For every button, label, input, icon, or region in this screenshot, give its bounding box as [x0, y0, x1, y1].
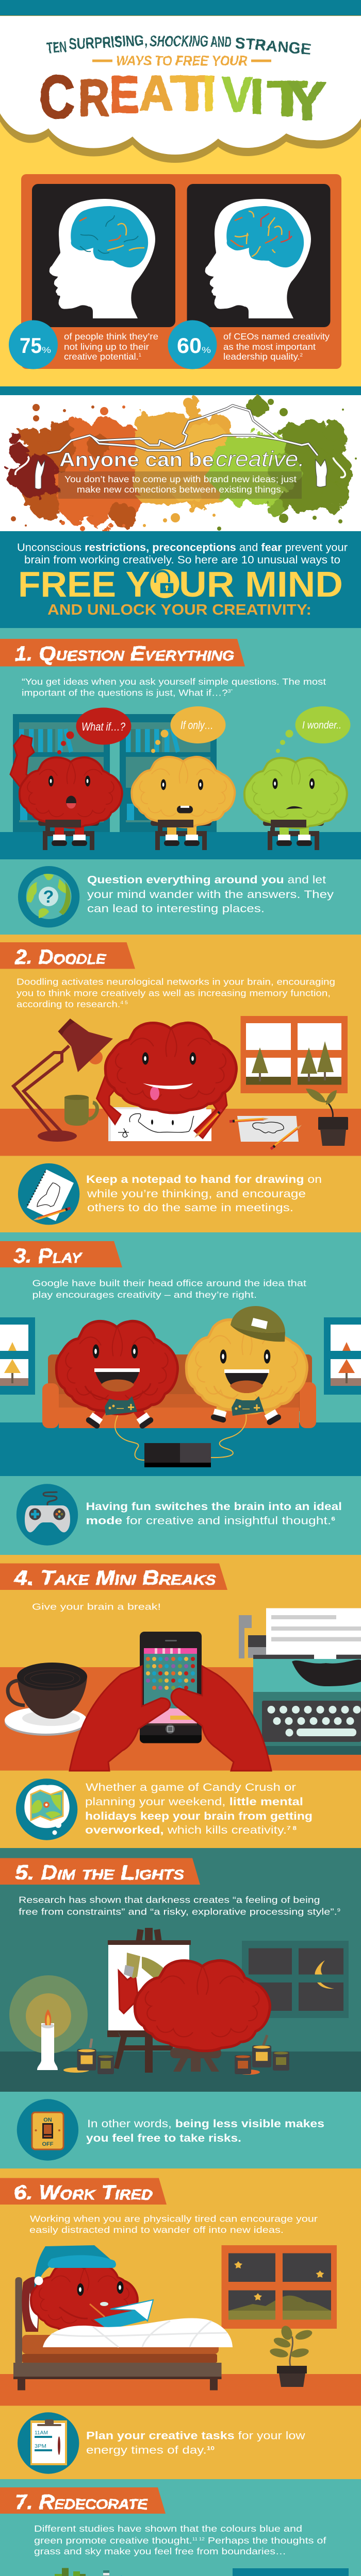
title: first line: AND: [210, 33, 232, 50]
heading: 1 Question Everything: 1. Question Everything: [14, 642, 234, 665]
text: section 4 tip: overworked, which kills creativity.: [85, 1824, 264, 1836]
console and cables: [115, 1413, 247, 1467]
night window: [222, 2245, 337, 2329]
stat: 75 percent: of people think they’re: [64, 331, 158, 342]
text: section 1 tip: Question everything around you and let: [87, 874, 326, 886]
text: section 6 tip: 10: [207, 2445, 215, 2451]
text: section 1 quote: 3”: [228, 688, 233, 693]
character: red brain arms: [70, 1666, 271, 1771]
text: section 2 intro: according to research.: [17, 999, 106, 1009]
heading: 4 Take Mini Breaks: [0, 1563, 227, 1590]
text: section 5 intro: free from constraints” and “a risky, explorative processing style”.: [19, 1906, 274, 1917]
icon: clipboard: 3PM: [35, 2444, 46, 2449]
panel: left head: [32, 184, 175, 327]
text: section 1 quote: important of the questions is just, What if…?: [22, 687, 198, 698]
text: section 6 tip: [86, 2430, 305, 2456]
city window: [233, 2568, 349, 2576]
text: section 4 intro: Give your brain a break!: [32, 1601, 161, 1612]
typewriter: [239, 1608, 361, 1755]
blanket: [43, 2318, 233, 2347]
panel: free your mind intro: AND UNLOCK YOUR CREATIVITY:: [47, 602, 311, 618]
section 5 background: [0, 1848, 361, 2052]
text: section 2 intro: 4 5: [120, 1000, 128, 1005]
text: section 5 intro: Research has shown that darkness creates “a feeling of being: [19, 1895, 320, 1905]
panel: free your mind intro: brain from working creatively. So here are 10 unusual ways to: [24, 554, 340, 566]
character: orange gamer: [186, 1306, 307, 1426]
stat: 60 percent: of CEOs named creativity: [223, 331, 330, 342]
panel: yellow header background: [0, 103, 361, 386]
section 5 tip background: [0, 2092, 361, 2168]
title: first line: SURPRISING,: [69, 32, 147, 53]
icon: padlock O: [151, 569, 179, 598]
section 4 background: [0, 1555, 361, 1848]
candle with glow: [9, 1975, 88, 2070]
text: section 4 tip: Whether a game of Candy Crush or: [86, 1782, 296, 1793]
heading: 6 Work Tired: [0, 2178, 167, 2205]
paint cans: [63, 2035, 289, 2075]
callout box: You don’t have to come up with brand new ideas; just: [64, 474, 297, 484]
callout box: [58, 471, 302, 499]
heading: 3 Play: [0, 1241, 122, 1267]
text: section 1 tip: [87, 874, 334, 915]
icon: clipboard: 11AM: [35, 2430, 48, 2436]
heading: 2 Doodle: [0, 942, 135, 969]
text: section 3 tip: Having fun switches the brain into an ideal: [86, 1501, 342, 1513]
section 3 background: [0, 1232, 361, 1555]
stat: 60 percent: leadership quality.: [223, 351, 296, 362]
character: red gamer: [56, 1321, 178, 1430]
stat: 60 percent: %: [202, 345, 211, 355]
window: [240, 1016, 348, 1093]
text: section 6 intro: [29, 2213, 318, 2235]
title: first line: SHOCKING: [150, 33, 208, 50]
heading: Anyone can be creative: creative.: [216, 447, 305, 471]
heading: Anyone can be creative: [59, 447, 305, 471]
stat: 60 percent: 2: [300, 352, 303, 358]
heading: 3 Play: 3. Play: [14, 1245, 83, 1267]
heading: 1 Question Everything: [0, 639, 245, 667]
text: section 2 tip: [86, 1174, 322, 1214]
illustration: mini break desk: [0, 1608, 361, 1771]
panel: statistics: [9, 174, 341, 369]
icon: map thought bubble: [16, 1778, 77, 1840]
icon: light switch: [17, 2099, 78, 2161]
text: section 4 tip: planning your weekend, little mental: [85, 1796, 303, 1808]
sofa: [42, 1354, 316, 1428]
text: section 7 intro: Different studies have shown that the colours blue and: [34, 2523, 302, 2534]
character: tired brain: [31, 2245, 153, 2334]
plant: [269, 2324, 314, 2387]
text: section 3 intro: [32, 1278, 306, 1300]
character: red brain raising arm: [10, 735, 122, 850]
text: section 7 intro: 11 12: [192, 2537, 205, 2541]
panel: free your mind intro: Unconscious restrictions, preconceptions and fear prevent your: [17, 542, 348, 553]
title: CREATIVITY: Y: [288, 72, 326, 131]
stat: 75 percent: 1: [139, 352, 141, 358]
icon: clipboard: [18, 2412, 79, 2474]
text: section 3 tip: 6: [331, 1516, 335, 1522]
callout box: make new connections between existing things.: [77, 484, 284, 495]
icon: light switch: ON: [43, 2117, 52, 2123]
heading: 7 Redecorate: 7. Redecorate: [15, 2491, 148, 2514]
icon: notepad: [18, 1163, 79, 1225]
title: CREATIVITY: T: [170, 66, 214, 121]
section 6 background: [0, 2168, 361, 2479]
mug: [64, 1095, 97, 1126]
text: section 7 intro: green promote creative thought.: [34, 2535, 162, 2546]
illustration: playing video games: [0, 1306, 361, 1476]
text: section 6 intro: Working when you are physically tired can encourage your: [30, 2213, 318, 2224]
text: section 7 intro: [34, 2523, 326, 2556]
text: section 1 tip: can lead to interesting places.: [87, 903, 265, 915]
text: section 3 intro: Google have built their head office around the idea that: [32, 1278, 306, 1288]
title: CREATIVITY: E: [109, 66, 139, 124]
heading: 5 Dim the Lights: 5. Dim the Lights: [15, 1861, 184, 1884]
text: section 1 tip: your mind wander with the answers. They: [87, 889, 334, 901]
stat: 75 percent: creative potential.: [64, 351, 135, 362]
text: section 2 intro: you to think more creatively as well as increasing memory function,: [17, 988, 331, 998]
title: first line: TEN: [46, 38, 68, 57]
speech bubbles: I wonder..: [302, 720, 341, 731]
title: CREATIVITY: V: [222, 67, 252, 122]
top teal band: [0, 0, 361, 16]
text: section 4 tip: [85, 1782, 313, 1836]
text: section 1 quote: “You get ideas when you ask yourself simple questions. The most: [22, 676, 326, 687]
easel and canvas: [107, 1928, 191, 2073]
text: section 2 intro: [17, 977, 335, 1009]
cloud header: [0, 15, 361, 163]
stat: 75 percent: 75: [20, 333, 42, 358]
panel: paint splatter: [7, 398, 357, 531]
night window: [242, 1941, 349, 2018]
panel: free your mind intro: [0, 531, 361, 628]
character: orange brain: [132, 757, 235, 850]
section 2 background: [0, 935, 361, 1232]
text: section 6 tip: energy times of day.: [86, 2444, 183, 2456]
windows: [0, 1317, 361, 1395]
title: first line: STRANGE: [234, 35, 312, 58]
papers and pencils: [108, 1107, 303, 1150]
nightcap: [34, 2245, 116, 2287]
text: section 2 tip: others to do the same in meetings.: [87, 1202, 293, 1214]
text: section 3 tip: [86, 1501, 342, 1527]
icon: globe question: [18, 866, 79, 927]
plant: [306, 1089, 348, 1146]
text: section 6 tip: Plan your creative tasks for your low: [86, 2430, 305, 2442]
illustration: tired in bed: [0, 2245, 361, 2406]
title: CREATIVITY: R: [78, 69, 109, 127]
title: CREATIVITY: A: [139, 66, 173, 121]
wires and clips: [15, 405, 345, 478]
title: CREATIVITY: T: [267, 71, 307, 126]
icon: light switch: OFF: [42, 2141, 54, 2147]
shelf of books: [51, 2568, 132, 2576]
speech bubbles: [57, 706, 351, 754]
character: doodling brain: [97, 1023, 236, 1139]
section 1 background: [0, 628, 361, 935]
floor section 5: [0, 2052, 361, 2092]
text: section 2 intro: Doodling activates neurological networks in your brain, encouraging: [17, 977, 335, 987]
character: green brain: [244, 758, 347, 850]
panel: free your mind intro: UR MIND: [179, 564, 343, 604]
text: section 1 quote: [22, 676, 326, 698]
stat: 75 percent: [9, 320, 158, 369]
stat: 60 percent: [168, 320, 330, 369]
illustration: classroom: [0, 706, 361, 859]
title: CREATIVITY: C: [39, 63, 75, 131]
teal divider: [0, 386, 361, 395]
stool and brain: [119, 1953, 270, 2072]
panel: right head: [187, 184, 330, 327]
text: section 3 tip: mode for creative and insightful thought.: [86, 1515, 288, 1527]
title: first line: [46, 32, 312, 58]
heading: 2 Doodle: 2. Doodle: [14, 946, 106, 969]
text: section 6 intro: easily distracted mind to wander off into new ideas.: [29, 2225, 284, 2235]
panel: free your mind intro: FREE Y: [18, 564, 150, 604]
heading: 5 Dim the Lights: [0, 1858, 200, 1885]
text: section 2 tip: Keep a notepad to hand for drawing on: [86, 1174, 322, 1185]
cap: [231, 1306, 285, 1342]
heading: Anyone can be creative: Anyone can be: [59, 449, 214, 471]
text: section 4 tip: 7 8: [287, 1825, 297, 1832]
notebook: [90, 2300, 153, 2330]
heading: 7 Redecorate: [0, 2487, 166, 2514]
stat: 75 percent: not living up to their: [64, 342, 149, 352]
text: section 7 intro: grass and sky make you feel free from boundaries…: [34, 2546, 286, 2556]
stat: 60 percent: 60: [177, 333, 202, 358]
stat: 75 percent: %: [42, 345, 51, 355]
illustration: redecorated office: [0, 2568, 361, 2576]
text: section 4 tip: holidays keep your brain from getting: [85, 1810, 313, 1822]
bed: [13, 2277, 222, 2391]
text: section 5 tip: [86, 2118, 324, 2144]
bookshelf: [13, 714, 217, 832]
illustration: painting in the dark: [9, 1928, 349, 2075]
phone: [140, 1632, 202, 1743]
illustration: doodling at desk: [0, 1016, 361, 1156]
text: section 7 intro: Perhaps the thoughts of: [205, 2535, 326, 2546]
text: section 3 intro: play encourages creativity – and they’re right.: [32, 1290, 257, 1300]
speech bubbles: If only…: [180, 719, 214, 732]
speech bubbles: What if…?: [81, 720, 126, 733]
text: section 2 tip: while you’re thinking, and encourage: [87, 1188, 306, 1200]
stat: 60 percent: as the most important: [223, 342, 316, 352]
text: section 5 tip: In other words, being less visible makes: [87, 2118, 324, 2130]
text: section 5 tip: you feel free to take risks.: [86, 2132, 241, 2144]
section 7 background: [0, 2479, 361, 2576]
heading: 4 Take Mini Breaks: 4. Take Mini Breaks: [14, 1567, 216, 1589]
heading: 6 Work Tired: 6. Work Tired: [14, 2181, 153, 2204]
text: section 5 intro: [19, 1895, 340, 1917]
icon: globe question: ?: [43, 887, 54, 907]
title: CREATIVITY: I: [250, 69, 264, 124]
coffee cup: [5, 1663, 87, 1736]
icon: gamepad: [17, 1484, 78, 1546]
title: CREATIVITY: I: [203, 66, 215, 121]
title: second line with dashes: WAYS TO FREE YOUR: [116, 53, 248, 69]
title: CREATIVITY: [39, 63, 326, 131]
lamp: [13, 1019, 113, 1142]
text: section 5 intro: 9: [337, 1907, 340, 1912]
